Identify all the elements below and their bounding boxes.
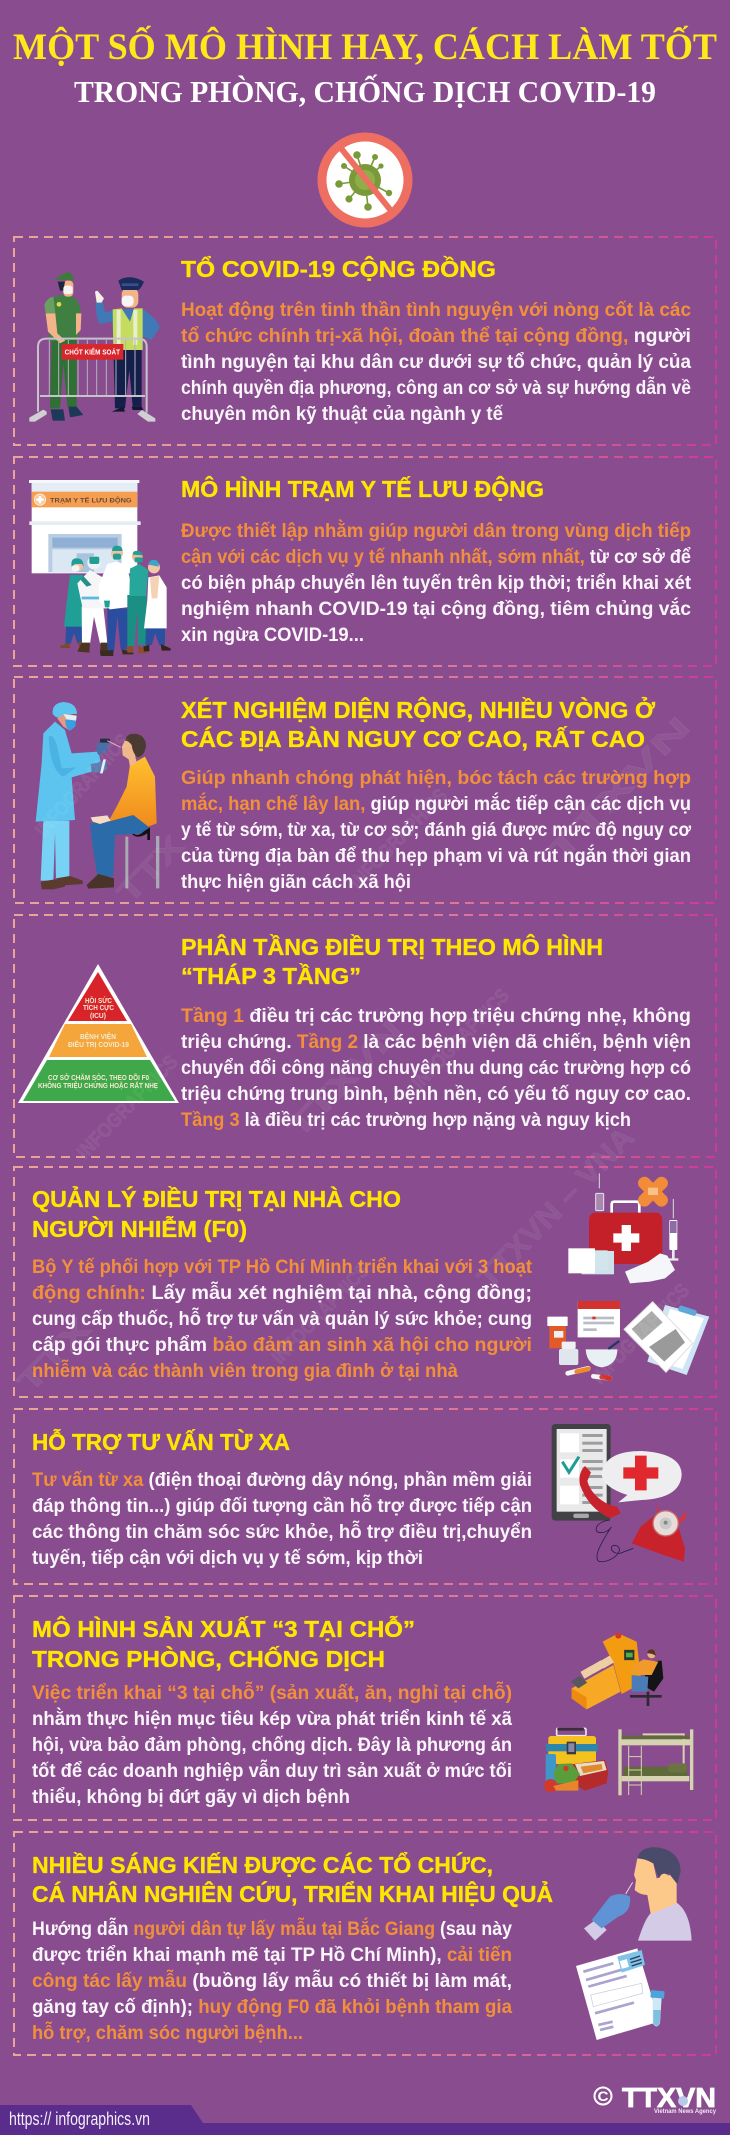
chart: three-tier pyramid: KHÔNG TRIỆU CHỨNG HOẶC RẤT NHẸ	[38, 1080, 158, 1090]
panel: Xét nghiệm diện rộng	[36, 695, 691, 893]
icon: mobile health station and staff	[29, 480, 171, 656]
text block	[181, 767, 691, 893]
text block: nghiệm nhanh COVID-19 tại cộng đồng, tiêm chủng vắc	[181, 596, 691, 620]
icon: first aid kit and medical supplies	[547, 1166, 709, 1378]
footer band: https:// infographics.vn	[9, 2109, 150, 2129]
icon: factory machine, food box and bunk bed	[544, 1633, 693, 1795]
panel: Nhiều sáng kiến	[32, 1847, 692, 2044]
watermarks: TTXVN – VNA	[471, 1121, 641, 1295]
chart: three-tier pyramid: HỒI SỨC	[85, 995, 112, 1005]
text block: hỗ trợ, chăm sóc người bệnh...	[32, 2020, 303, 2044]
heading	[32, 1851, 553, 1907]
heading	[181, 933, 603, 989]
text block: thực hiện giãn cách xã hội	[181, 871, 411, 893]
panel: Mô hình sản xuất 3 tại chỗ	[32, 1614, 693, 1808]
text block: nhằm thực hiện mục tiêu kép vừa phát triển kinh tế xã	[32, 1706, 512, 1730]
text block: y tế từ sớm, từ xa, từ cơ sở; đánh giá được mức độ nguy cơ	[181, 819, 691, 841]
chart: three-tier pyramid: (ICU)	[90, 1011, 106, 1020]
watermarks	[11, 710, 697, 1400]
text block: cấp gói thực phẩm bảo đảm an sinh xã hội cho người	[32, 1334, 532, 1356]
text block: triệu chứng trung bình, bệnh nền, có yếu tố nguy cơ cao.	[181, 1083, 691, 1105]
chart: three-tier pyramid: BỆNH VIỆN	[80, 1032, 116, 1041]
watermarks: INFOGRAPHICS	[346, 785, 452, 893]
text block: Việc triển khai “3 tại chỗ” (sản xuất, ăn, nghỉ tại chỗ)	[32, 1680, 512, 1704]
text block: công tác lấy mẫu (buồng lấy mẫu có thiết bị làm mát,	[32, 1968, 512, 1992]
text block	[181, 299, 691, 425]
text block: triệu chứng. Tầng 2 là các bệnh viện dã chiến, bệnh viện	[181, 1031, 691, 1053]
footer band	[0, 2105, 730, 2135]
heading: MÔ HÌNH SẢN XUẤT “3 TẠI CHỖ”	[32, 1614, 415, 1642]
text block: Hoạt động trên tinh thần tình nguyện với nòng cốt là các	[181, 299, 691, 321]
title: TRONG PHÒNG, CHỐNG DỊCH COVID-19	[74, 73, 656, 109]
title: MỘT SỐ MÔ HÌNH HAY, CÁCH LÀM TỐT	[13, 24, 717, 68]
heading: CÁC ĐỊA BÀN NGUY CƠ CAO, RẤT CAO	[181, 725, 645, 752]
chart: three-tier pyramid: CƠ SỞ CHĂM SÓC, THEO DÕI F0	[48, 1073, 149, 1082]
heading: TRONG PHÒNG, CHỐNG DỊCH	[32, 1645, 385, 1672]
text block	[32, 1680, 512, 1808]
chart: three-tier pyramid: TÍCH CỰC	[83, 1003, 114, 1012]
heading	[32, 1614, 415, 1672]
text block: Tầng 3 là điều trị các trường hợp nặng và nguy kịch	[181, 1109, 631, 1131]
watermarks: INFOGRAPHICS	[31, 730, 135, 841]
watermarks: TTXVN	[541, 710, 697, 870]
heading	[32, 1184, 401, 1242]
heading: QUẢN LÝ ĐIỀU TRỊ TẠI NHÀ CHO	[32, 1184, 401, 1212]
logo: TTXVN: TTXVN	[622, 2082, 716, 2113]
text block	[181, 1005, 691, 1131]
watermarks: INFOGRAPHICS	[408, 985, 514, 1093]
panel: Quản lý điều trị tại nhà	[32, 1166, 709, 1382]
text block	[32, 1256, 532, 1382]
text block: Được thiết lập nhằm giúp người dân trong vùng dịch tiếp	[181, 518, 691, 542]
heading: NGƯỜI NHIỄM (F0)	[32, 1214, 247, 1242]
text block: Tầng 1 điều trị các trường hợp triệu chứng nhẹ, không	[181, 1005, 691, 1027]
text block: tổ chức chính trị-xã hội, đoàn thể tại cộng đồng, người	[181, 325, 691, 347]
text block: thiểu, không bị đứt gãy vì dịch bệnh	[32, 1786, 350, 1808]
text block: có biện pháp chuyển lên tuyến trên kịp thời; triển khai xét	[181, 572, 691, 594]
icon: mobile health station and staff: TRẠM Y TẾ LƯU ĐỘNG	[50, 495, 132, 505]
panel: Mô hình trạm y tế lưu động	[29, 475, 691, 656]
watermarks: TTX	[111, 829, 191, 910]
heading: TỔ COVID-19 CỘNG ĐỒNG	[181, 255, 496, 282]
text block: Giúp nhanh chóng phát hiện, bóc tách các trường hợp	[181, 767, 691, 789]
heading: “THÁP 3 TẦNG”	[181, 962, 361, 989]
title	[13, 24, 717, 109]
heading: NHIỀU SÁNG KIẾN ĐƯỢC CÁC TỔ CHỨC,	[32, 1851, 493, 1878]
watermarks: INFOGRAPHICS	[268, 1260, 374, 1368]
text block: xin ngừa COVID-19...	[181, 624, 364, 646]
text block	[181, 518, 691, 646]
watermarks: INFOGRAPHICS	[588, 1280, 694, 1388]
text block: đáp thông tin...) giúp đối tượng cần hỗ trợ được tiếp cận	[32, 1493, 532, 1517]
icon: self sampling and test form	[576, 1847, 692, 2040]
text block: Bộ Y tế phối hợp với TP Hồ Chí Minh triển khai với 3 hoạt	[32, 1256, 532, 1278]
text block: các thông tin chăm sóc sức khỏe, hỗ trợ điều trị,chuyển	[32, 1519, 532, 1543]
text block: mắc, hạn chế lây lan, giúp người mắc tiếp cận các dịch vụ	[181, 791, 691, 815]
text block: chuyên môn kỹ thuật của ngành y tế	[181, 403, 503, 425]
text block	[32, 1469, 532, 1569]
text block: găng tay cố định); huy động F0 đã khỏi bệnh tham gia	[32, 1996, 512, 2018]
heading: XÉT NGHIỆM DIỆN RỘNG, NHIỀU VÒNG Ở	[181, 695, 655, 723]
text block: cận với các dịch vụ y tế nhanh nhất, sớm nhất, từ cơ sở để	[181, 546, 691, 568]
watermarks: INFOGRAPHICS	[73, 1051, 182, 1163]
text block: chuyển đổi công năng chuyên thu dung các trường hợp có	[181, 1057, 691, 1079]
heading: HỖ TRỢ TƯ VẤN TỪ XA	[32, 1427, 290, 1455]
icon: medic swabbing seated patient	[36, 702, 159, 889]
watermarks: TTX	[11, 1312, 98, 1400]
icon: soldier and police at barrier: CHỐT KIỂM SOÁT	[65, 347, 121, 357]
heading: CÁ NHÂN NGHIÊN CỨU, TRIỂN KHAI HIỆU QUẢ	[32, 1879, 553, 1907]
text block: được triển khai mạnh mẽ tại TP Hồ Chí Minh), cải tiến	[32, 1944, 512, 1966]
heading	[181, 695, 655, 752]
text block: nhiễm và các thành viên trong gia đình ở tại nhà	[32, 1358, 458, 1382]
logo: TTXVN: C	[598, 2088, 608, 2104]
heading: MÔ HÌNH TRẠM Y TẾ LƯU ĐỘNG	[181, 475, 544, 502]
text block: của từng địa bàn để thu hẹp phạm vi và rút ngắn thời gian	[181, 843, 691, 867]
text block: tình nguyện tại khu dân cư dưới sự tổ chức, quản lý của	[181, 351, 691, 373]
text block	[32, 1916, 512, 2044]
text block: cung cấp thuốc, hỗ trợ tư vấn và quản lý sức khỏe; cung	[32, 1306, 532, 1330]
icon: soldier and police at barrier	[29, 272, 160, 422]
text block: hội, vừa bảo đảm phòng, chống dịch. Đây là phương án	[32, 1734, 512, 1756]
panel: Tổ COVID-19 cộng đồng	[29, 255, 691, 425]
heading: PHÂN TẦNG ĐIỀU TRỊ THEO MÔ HÌNH	[181, 933, 603, 960]
panel: Hỗ trợ tư vấn từ xa	[32, 1424, 687, 1569]
text block: tuyến, tiếp cận với dịch vụ y tế sớm, kịp thời	[32, 1547, 423, 1569]
chart: three-tier pyramid	[18, 964, 179, 1103]
panel: Phân tầng điều trị	[18, 933, 691, 1131]
logo: TTXVN: Vietnam News Agency	[654, 2108, 716, 2115]
text block: Hướng dẫn người dân tự lấy mẫu tại Bắc Giang (sau này	[32, 1916, 512, 1940]
text block: động chính: Lấy mẫu xét nghiệm tại nhà, cộng đồng;	[32, 1280, 532, 1304]
icon: phone, speech bubble and telephone	[552, 1424, 687, 1562]
text block: tốt để các doanh nghiệp vẫn duy trì sản xuất ở mức tối	[32, 1758, 512, 1782]
chart: three-tier pyramid: ĐIỀU TRỊ COVID-19	[68, 1039, 129, 1049]
icon: no virus	[322, 137, 408, 223]
watermarks: TTXVN	[281, 1014, 409, 1145]
text block: Tư vấn từ xa (điện thoại đường dây nóng, phần mềm giải	[32, 1469, 532, 1491]
